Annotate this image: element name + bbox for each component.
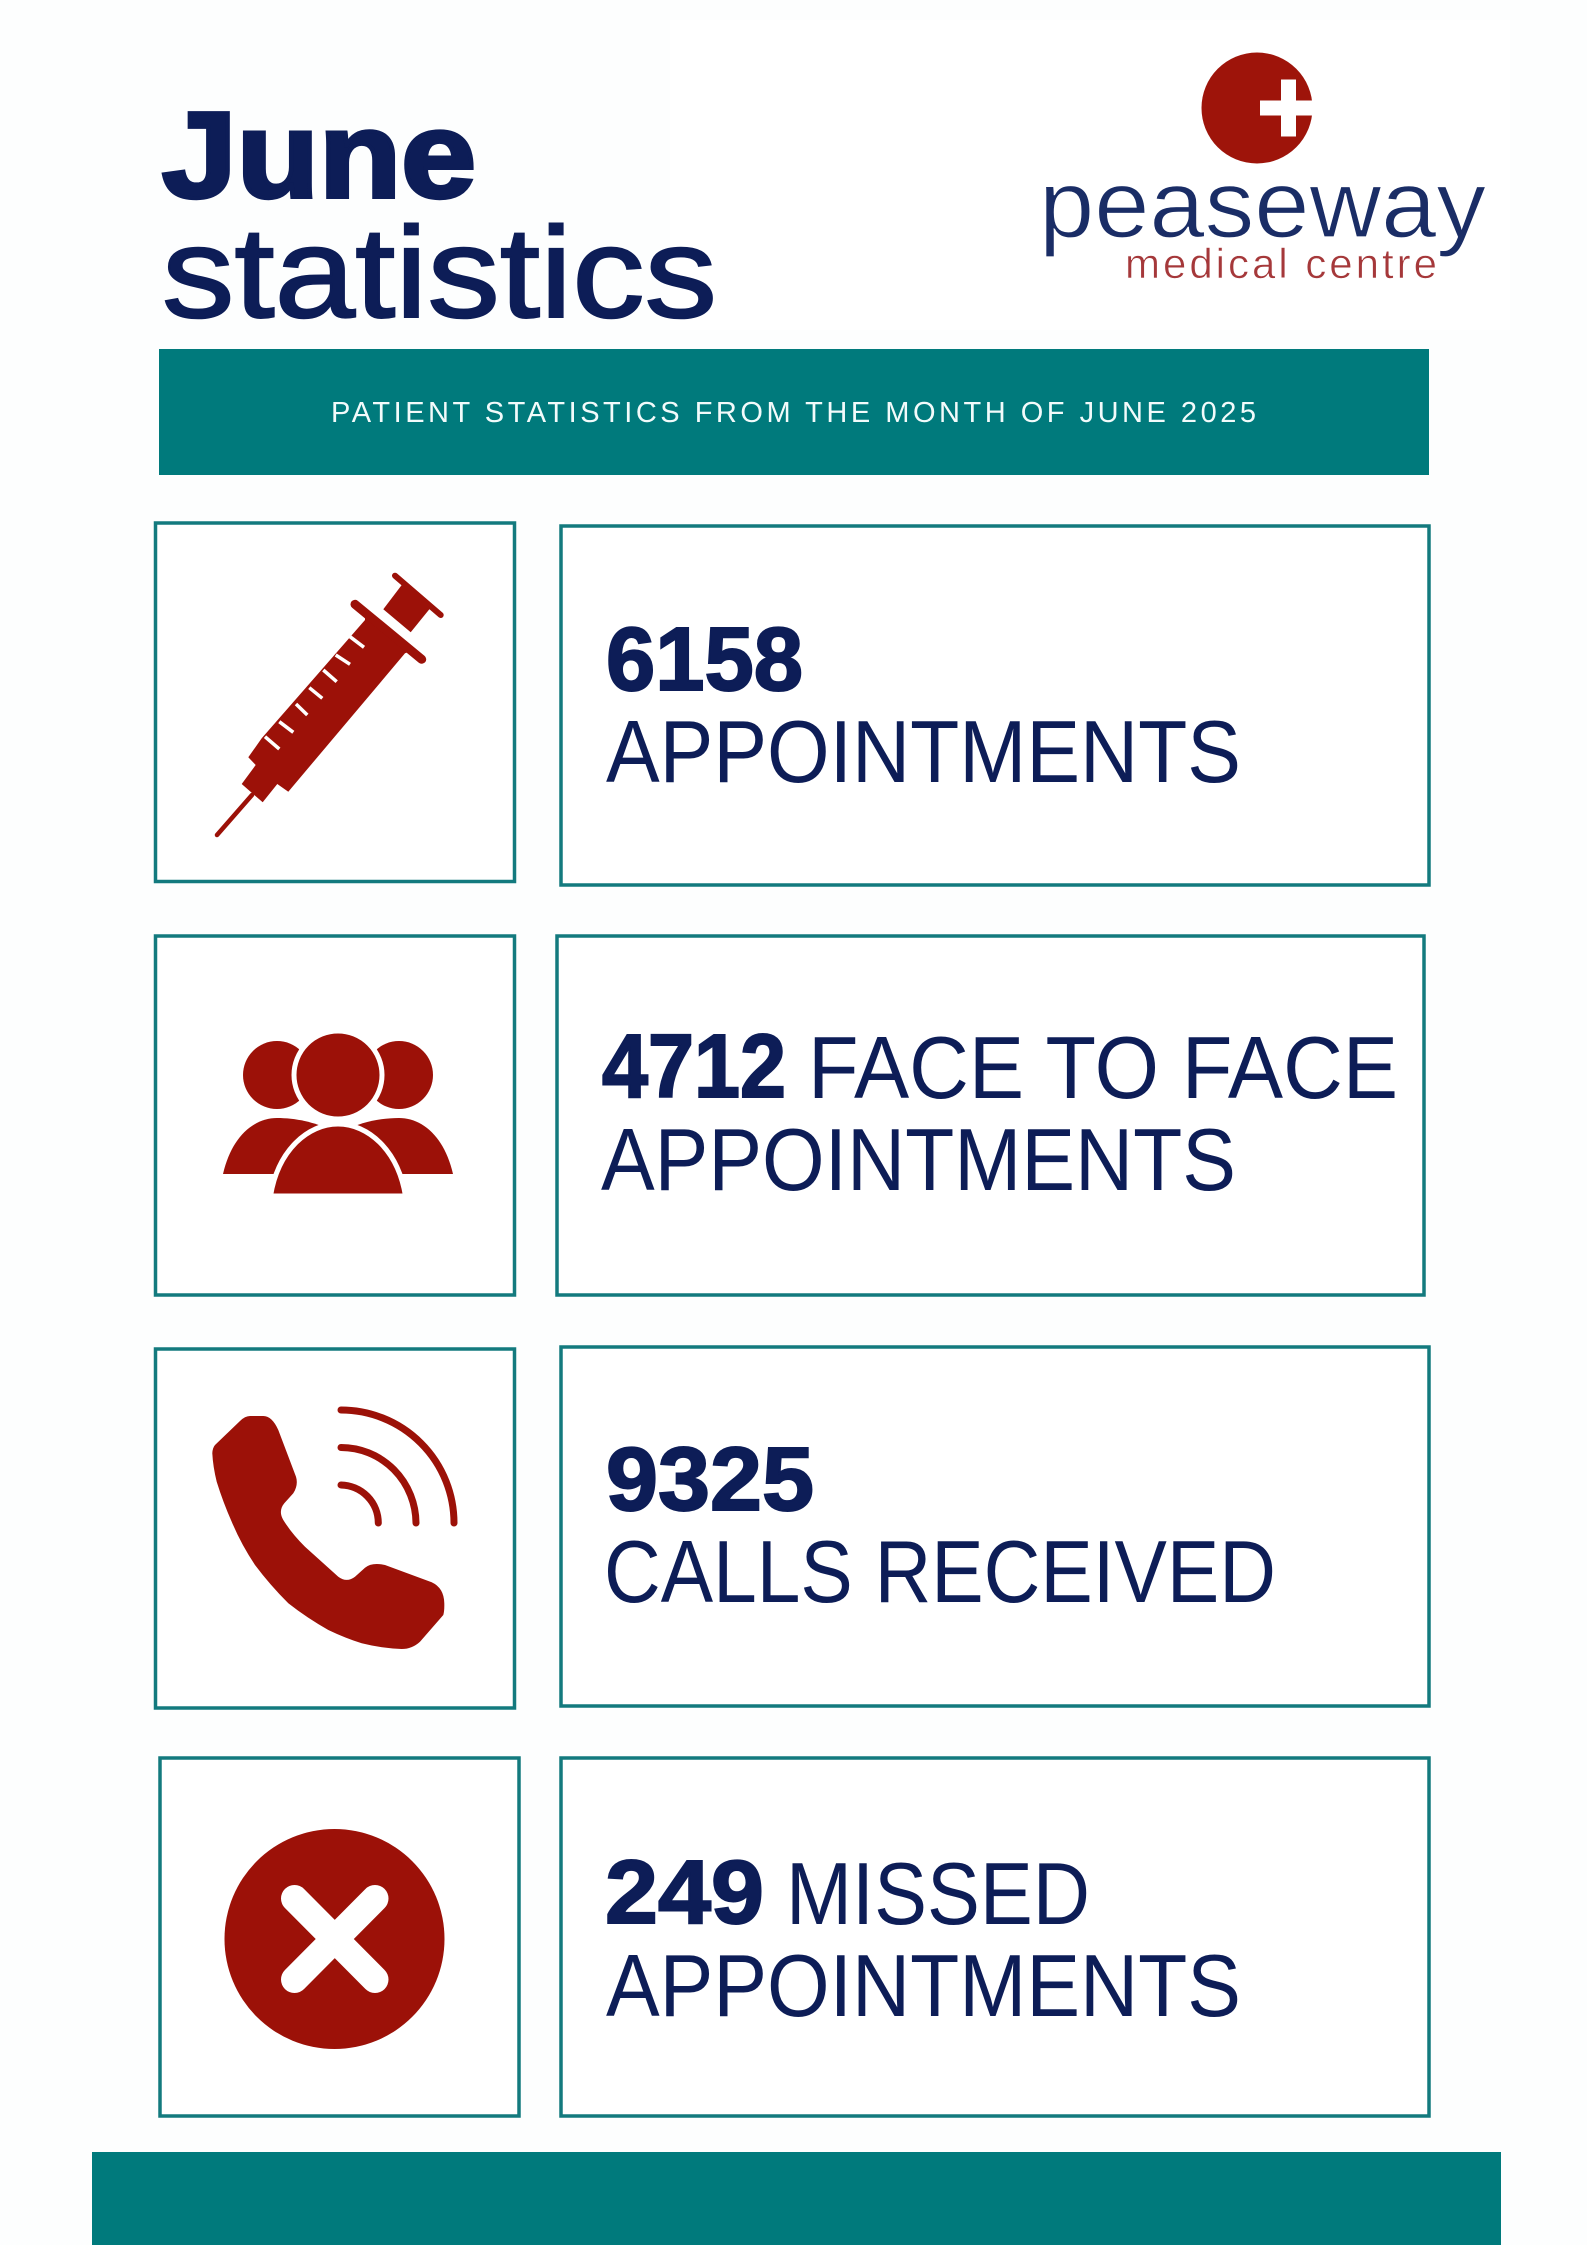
- panel: syringe icon: [156, 523, 514, 882]
- subtitle banner: PATIENT STATISTICS FROM THE MONTH OF JUNE 2025: [331, 397, 1256, 429]
- panel: people icon: [156, 936, 514, 1295]
- logo icon: red circle with cross: [1202, 52, 1314, 164]
- panel: 9325 calls received: CALLS RECEIVED: [604, 1522, 1276, 1621]
- logo: peaseway medical centre: medical centre: [1125, 240, 1437, 287]
- panel: phone icon: [156, 1349, 514, 1708]
- panel: 9325 calls received: 9325: [606, 1430, 814, 1530]
- logo: peaseway medical centre: peaseway: [1039, 151, 1486, 258]
- panel: 6158 appointments: APPOINTMENTS: [606, 702, 1241, 801]
- panel: 4712 face to face appointments: APPOINTMENTS: [601, 1110, 1236, 1209]
- panel: 249 missed appointments: MISSED: [786, 1844, 1090, 1943]
- icon: syringe: [217, 576, 441, 835]
- panel: 4712 face to face appointments: [557, 936, 1424, 1295]
- logo: peaseway medical centre: [1039, 52, 1486, 287]
- icon: red circle with white cross: [224, 1829, 444, 2049]
- icon: phone with signal: [212, 1410, 454, 1649]
- subtitle banner: [159, 349, 1429, 475]
- panel: 9325 calls received: [561, 1347, 1429, 1706]
- panel: 4712 face to face appointments: FACE TO FACE: [808, 1018, 1398, 1117]
- panel: 249 missed appointments: APPOINTMENTS: [606, 1936, 1241, 2035]
- icon: three people: [223, 1031, 453, 1196]
- panel: cross icon: [160, 1758, 519, 2116]
- panel: 249 missed appointments: 249: [605, 1843, 764, 1943]
- footer bar: [92, 2152, 1501, 2245]
- title: statistics: [162, 201, 717, 345]
- panel: 249 missed appointments: [561, 1758, 1429, 2116]
- title: June: [162, 87, 476, 223]
- title: [162, 87, 717, 345]
- panel: 4712 face to face appointments: 4712: [602, 1017, 786, 1117]
- panel: 6158 appointments: [561, 526, 1429, 885]
- panel: 6158 appointments: 6158: [606, 610, 803, 710]
